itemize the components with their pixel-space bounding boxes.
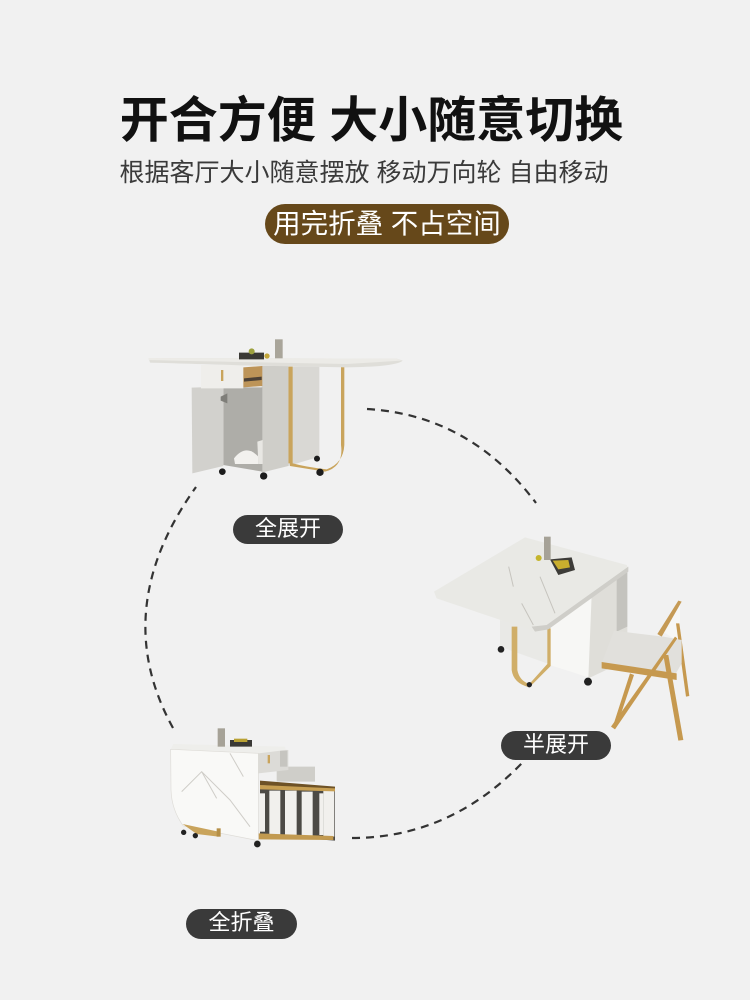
table: fully extended [149,339,403,480]
dashed arrow: half to folded [352,762,523,838]
stored chair columns [259,791,334,837]
label: fully folded [186,909,297,939]
label: fully extended [233,515,343,544]
dashed arrow: folded to full [145,487,196,728]
table: fully folded with stored chairs [171,728,335,847]
label: fully folded: 全折叠 [208,910,274,935]
dashed arrow: full to half [367,409,536,503]
table: half extended with chair [434,537,689,741]
badge: fold away: 用完折叠 不占空间 [273,208,501,239]
title: 开合方便 大小随意切换 [120,94,623,148]
subtitle: 根据客厅大小随意摆放 移动万向轮 自由移动 [120,159,608,187]
label: half extended [501,731,611,760]
label: fully extended: 全展开 [255,516,321,541]
label: half extended: 半展开 [523,732,589,757]
